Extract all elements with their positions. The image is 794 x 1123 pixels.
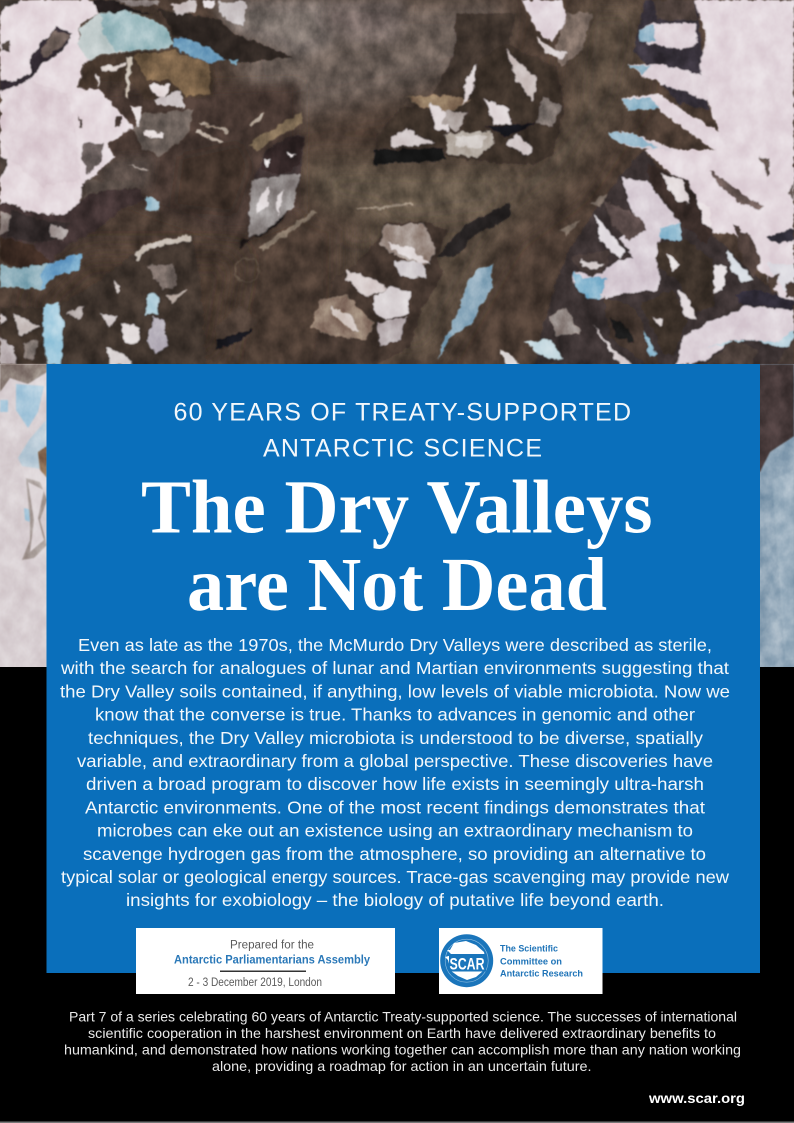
photo: satellite image of the McMurdo Dry Valleys — [0, 0, 794, 668]
icon: SCAR roundel with Antarctica — [440, 934, 493, 987]
subtitle — [174, 398, 631, 463]
icon: SCAR roundel with Antarctica: SCAR — [450, 954, 484, 974]
black band — [0, 667, 794, 1123]
body text: know that the converse is true. Thanks to advances in genomic and other — [95, 705, 695, 725]
text: committee name: Committee on — [500, 956, 562, 966]
panel: blue main panel — [46, 364, 760, 973]
logo: Antarctic Parliamentarians Assembly card: 2 - 3 December 2019, London — [188, 977, 322, 989]
photo layer: right ice shelf and rock — [758, 364, 794, 668]
photo layer: rock and snow shapes — [0, 0, 794, 365]
footer text — [64, 1010, 741, 1074]
logo: Antarctic Parliamentarians Assembly card: Prepared for the — [230, 940, 314, 952]
top centre and right, central ridge, right snow — [374, 0, 794, 200]
title: are Not Dead — [187, 543, 607, 627]
body text — [60, 635, 730, 910]
body text: driven a broad program to discover how life exists in seemingly ultra-harsh — [86, 774, 704, 794]
body text: Even as late as the 1970s, the McMurdo Dry Valleys were described as sterile, — [78, 635, 712, 655]
body text: scavenge hydrogen gas from the atmosphere, so providing an alternative to — [83, 844, 706, 864]
photo layer: valley floor tones — [33, 0, 650, 363]
website url: www.scar.org — [648, 1090, 745, 1106]
footer text: humankind, and demonstrated how nations working together can accomplish more than any nation working — [64, 1043, 741, 1058]
footer text: scientific cooperation in the harshest environment on Earth have delivered extraordinary benefits to — [88, 1026, 716, 1041]
body text: microbes can eke out an existence using an extraordinary mechanism to — [97, 821, 693, 841]
title: The Dry Valleys — [141, 466, 652, 550]
flecks — [100, 63, 127, 72]
logo: Antarctic Parliamentarians Assembly card — [136, 928, 395, 994]
logo: SCAR card — [439, 928, 602, 994]
tongue — [79, 12, 174, 60]
snow — [0, 0, 135, 215]
text: committee name: Antarctic Research — [500, 968, 583, 979]
body text: typical solar or geological energy sources. Trace-gas scavenging may provide new — [61, 867, 729, 887]
lower left from close crop — [0, 180, 510, 365]
body text: techniques, the Dry Valley microbiota is understood to be diverse, spatially — [88, 728, 703, 748]
body text: variable, and extraordinary from a global perspective. These discoveries have — [77, 751, 713, 771]
title — [141, 466, 652, 627]
body text: the Dry Valley soils contained, if anything, low levels of viable microbiota. Now we — [60, 681, 730, 701]
subtitle: ANTARCTIC SCIENCE — [263, 435, 542, 463]
photo layer: blended rock tones — [80, 0, 405, 233]
footer text: alone, providing a roadmap for action in an uncertain future. — [212, 1059, 592, 1074]
island ridge — [248, 135, 305, 238]
photo layer: grain texture — [0, 0, 794, 667]
subtitle: 60 YEARS OF TREATY-SUPPORTED — [174, 398, 631, 426]
body text: with the search for analogues of lunar and Martian environments suggesting that — [60, 658, 729, 678]
text: committee name: The Scientific — [500, 943, 558, 954]
lower right from close crop — [500, 150, 794, 365]
text: committee name — [500, 943, 583, 979]
top left from close crop — [0, 0, 305, 238]
body text: Antarctic environments. One of the most recent findings demonstrates that — [85, 797, 705, 817]
footer text: Part 7 of a series celebrating 60 years of Antarctic Treaty-supported science. The successes of international — [69, 1010, 737, 1025]
photo layer: lower left snowfield — [0, 364, 47, 668]
logo: Antarctic Parliamentarians Assembly card: Antarctic Parliamentarians Assembly — [174, 954, 371, 966]
body text: insights for exobiology – the biology of putative life beyond earth. — [126, 890, 664, 910]
